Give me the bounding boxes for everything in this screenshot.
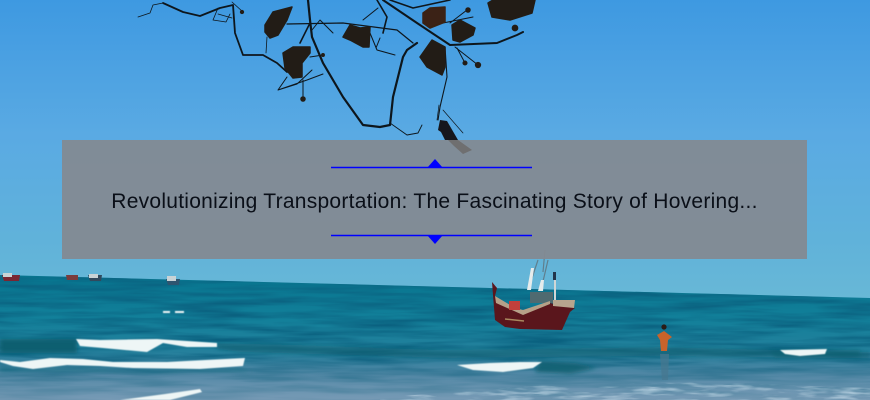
sky bbox=[0, 0, 870, 300]
sea bbox=[0, 275, 870, 400]
leaves and seed pods bbox=[241, 0, 535, 140]
sea ripples bbox=[0, 270, 870, 400]
top divider with triangle bbox=[331, 159, 532, 168]
foam texture bbox=[380, 382, 870, 400]
sea swell bands bbox=[0, 339, 870, 374]
reflected leaf showing through panel bbox=[448, 140, 472, 154]
waves bbox=[0, 311, 827, 400]
bottom divider with triangle bbox=[331, 234, 532, 244]
tree branches bbox=[138, 0, 523, 135]
person wading bbox=[657, 324, 672, 380]
fishing boat bbox=[492, 250, 575, 330]
title panel bbox=[62, 140, 807, 259]
distant boats bbox=[2, 273, 180, 285]
shallow water near shore bbox=[0, 355, 870, 400]
title text: Revolutionizing Transportation: The Fascinating Story of Hovering... bbox=[111, 190, 758, 213]
